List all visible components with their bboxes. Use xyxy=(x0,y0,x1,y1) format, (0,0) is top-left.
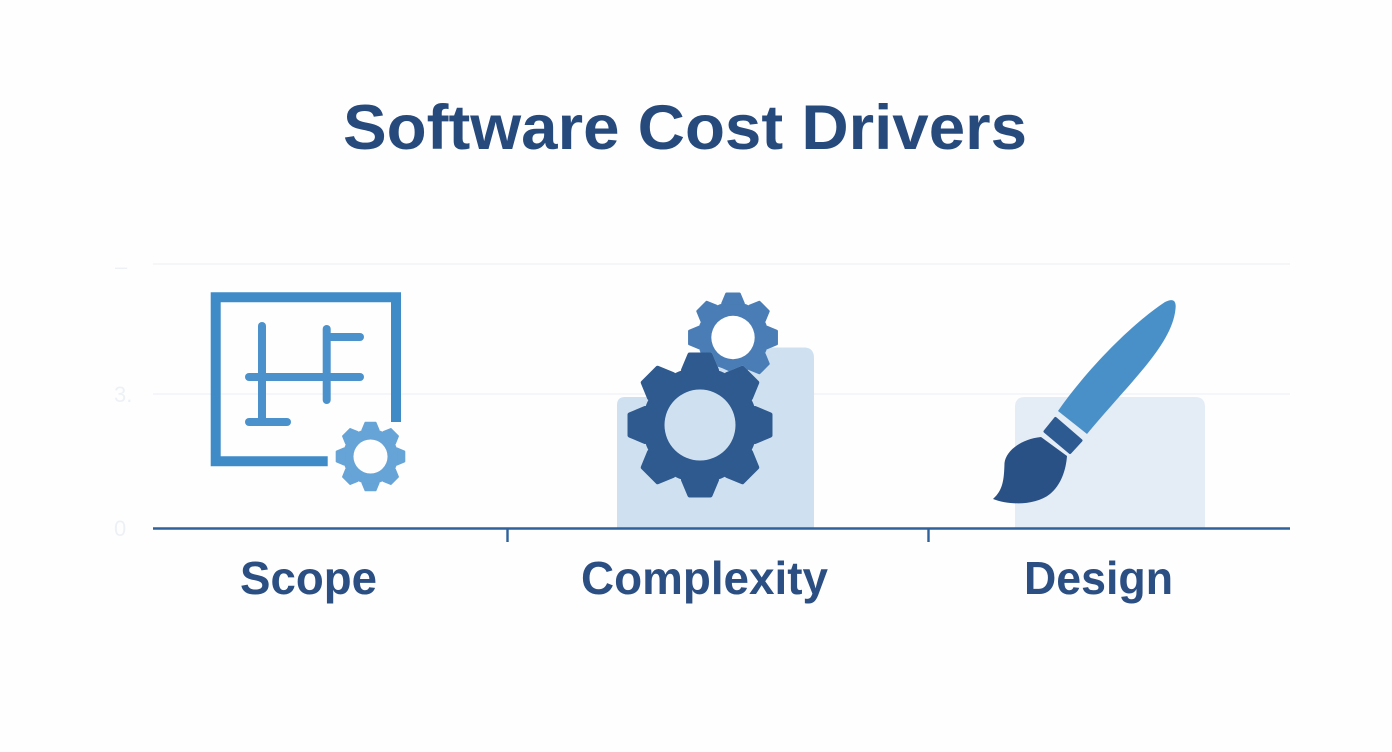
chart: cost drivers xyxy=(114,254,1290,542)
label: Scope: Scope xyxy=(240,552,377,604)
small gear xyxy=(689,294,777,381)
label: Design: Design xyxy=(1024,552,1173,604)
bar: complexity xyxy=(617,348,814,528)
y axis labels: – xyxy=(115,254,128,279)
y axis labels xyxy=(114,254,132,541)
icon: design paintbrush xyxy=(993,300,1176,503)
icon: scope blueprint xyxy=(216,297,404,490)
y axis labels: 3. xyxy=(114,382,132,407)
small gear on blueprint xyxy=(337,423,404,490)
brush head xyxy=(993,437,1067,503)
blueprint inner lines xyxy=(249,326,360,422)
label: Complexity: Complexity xyxy=(581,552,828,604)
icon: complexity gears xyxy=(630,294,777,496)
brush handle xyxy=(1058,300,1176,434)
large gear xyxy=(630,354,770,496)
y axis labels: 0 xyxy=(114,516,126,541)
title: Software Cost Drivers xyxy=(343,93,1027,163)
brush ferrule xyxy=(1045,418,1081,452)
axis baseline xyxy=(153,528,1290,542)
bar: design xyxy=(1015,397,1205,528)
blueprint frame xyxy=(216,297,396,461)
